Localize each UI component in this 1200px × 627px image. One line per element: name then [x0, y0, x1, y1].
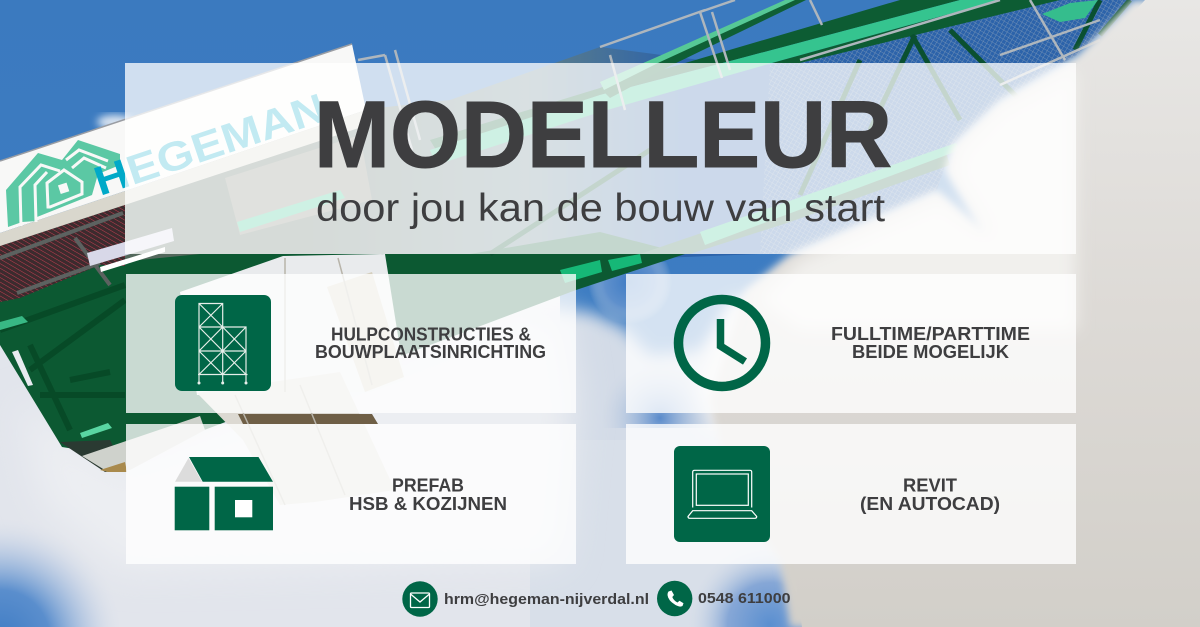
dark green truss body [0, 232, 685, 458]
label: fulltime [831, 323, 1030, 362]
label: hulpconstructies: HULPCONSTRUCTIES & [331, 324, 531, 344]
label: prefab: HSB & KOZIJNEN [349, 493, 507, 514]
label: fulltime: BEIDE MOGELIJK [852, 341, 1010, 362]
contact: email: hrm@hegeman-nijverdal.nl [444, 591, 649, 608]
title: MODELLEUR [314, 82, 892, 188]
icon: phone [657, 581, 692, 616]
label: revit [860, 474, 1000, 514]
label: revit: (EN AUTOCAD) [860, 493, 1000, 514]
logo wordmark: HEGEMAN [88, 84, 331, 205]
label: fulltime: FULLTIME/PARTTIME [831, 323, 1030, 344]
contact: phone: 0548 611000 [698, 590, 790, 607]
label: hulpconstructies [315, 324, 546, 362]
blurred foreground element on the right [710, 0, 1200, 627]
concrete blocks hanging from crane [180, 254, 405, 505]
icon: scaffold [175, 295, 271, 391]
icon: mail [402, 581, 438, 617]
label: prefab: PREFAB [392, 474, 464, 496]
card: fulltime panel [626, 274, 1076, 413]
card: hulpconstructies panel [126, 274, 576, 413]
upper beams [430, 0, 960, 150]
clouds behind crane [0, 262, 855, 627]
billboard with company logo [0, 44, 368, 246]
lower chord [640, 150, 950, 254]
logo mark: houses [6, 140, 120, 227]
top panel [125, 63, 1076, 254]
icon: laptop [674, 446, 770, 542]
label: prefab [349, 474, 507, 514]
grating between chords [600, 0, 1133, 254]
card: prefab panel [126, 424, 576, 564]
icon: clock [678, 300, 766, 386]
label: revit: REVIT [903, 474, 958, 496]
icon: prefab house [175, 457, 273, 530]
label: hulpconstructies: BOUWPLAATSINRICHTING [315, 341, 546, 362]
subtitle: door jou kan de bouw van start [316, 187, 885, 230]
card: revit panel [626, 424, 1076, 564]
